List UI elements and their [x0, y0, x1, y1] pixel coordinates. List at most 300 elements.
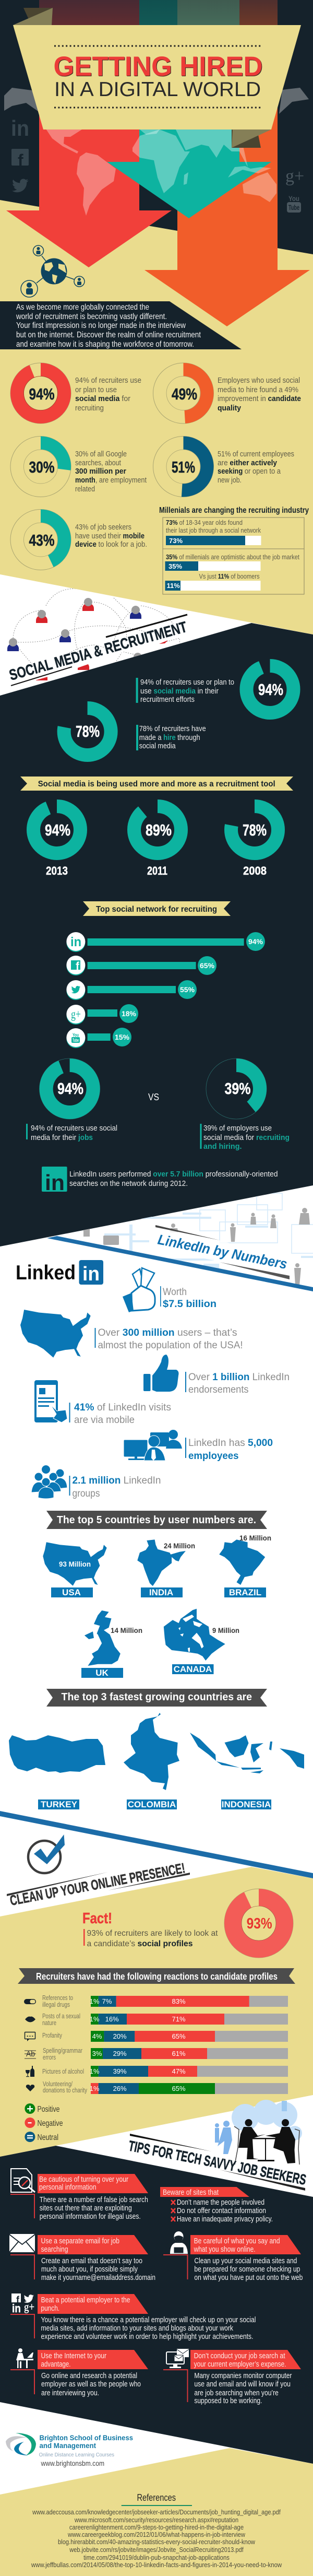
row: google plus: 18% — [122, 1009, 137, 1018]
tip: employer expense: your current employer’s expense. — [194, 2360, 286, 2369]
row: profanity: ... — [26, 2032, 34, 2038]
bar: 73% — [166, 536, 261, 545]
person: blue left — [7, 638, 19, 651]
row: profanity: Profanity — [42, 2032, 63, 2039]
text: 30% — [75, 450, 147, 493]
text: 30%: searches, about — [75, 459, 121, 467]
donut: 2013 — [33, 806, 80, 877]
map: canada: 9 Million — [212, 1626, 239, 1634]
fact heading: Fact! — [82, 1910, 112, 1927]
title banner — [13, 25, 301, 130]
tip: beware of sites: Have an inadequate privacy policy. — [177, 2215, 273, 2224]
panel: clean up your online presence — [0, 1811, 313, 2157]
subtitle: IN A DIGITAL WORLD — [54, 78, 261, 101]
intro panel — [0, 301, 242, 349]
text: employers vs: 39% of employers use — [203, 1124, 272, 1133]
tip: use internet: Use the Internet to your — [41, 2351, 106, 2360]
ribbon: top 3 fastest growing — [46, 1689, 267, 1707]
text: employers vs — [200, 1124, 290, 1151]
intro panel: and examine how it is shaping the workforce of tomorrow. — [16, 340, 194, 349]
text: 94% recruiters — [136, 678, 234, 704]
donut: 94% — [10, 363, 71, 424]
row: illegal drugs — [24, 1994, 288, 2008]
icon: linkedin tile: in — [45, 1170, 65, 1195]
references list — [31, 2508, 282, 2569]
icon: thumbs up — [143, 1355, 178, 1392]
donut: 2011: 89% — [146, 821, 172, 839]
row: alcohol: 39% — [113, 2067, 127, 2075]
map: usa large — [20, 1310, 91, 1358]
text: 78% hires: made a hire through — [139, 733, 200, 742]
ribbon: top social network: Top social network for recruiting — [96, 905, 217, 914]
stat: users — [95, 1327, 243, 1351]
arrow: orange — [145, 25, 310, 326]
fact text: a candidate’s social profiles — [87, 1939, 193, 1948]
text: 78% hires: 78% of recruiters have — [139, 724, 206, 733]
stat: mobile: 41% of LinkedIn visits — [74, 1402, 171, 1413]
donut: 49%: 49% — [172, 385, 197, 403]
tip: beware of sites: Beware of sites that — [163, 2188, 219, 2197]
text: 51%: 51% of current employees — [218, 450, 294, 458]
legend — [25, 2103, 63, 2142]
bar: 11%: 11% — [167, 582, 180, 590]
donut: 30%: 30% — [29, 458, 54, 476]
dark panel background — [0, 623, 313, 1246]
panel: millenials chart: their last job through a social network — [166, 526, 261, 534]
map: uk: UK — [95, 1668, 109, 1678]
tip: beat employer: media sites, add information to your sites and blogs about your work — [41, 2324, 234, 2333]
text: 30%: month, are employment — [75, 476, 147, 485]
row: charity: 1% — [90, 2085, 100, 2092]
text: linkedin searches: LinkedIn users performed over 5.7 billion professionally-oriented — [69, 1170, 278, 1179]
row: facebook: 65% — [200, 961, 215, 970]
stat: endorsements: endorsements — [188, 1384, 248, 1395]
tip: use internet — [10, 2348, 148, 2397]
donut: employers vs: 39% — [224, 1079, 250, 1098]
text: 94%: social media for — [75, 395, 130, 403]
row: profanity: 65% — [172, 2032, 186, 2040]
text: 94%: 94% of recruiters use — [75, 377, 141, 385]
map: canada — [164, 1609, 239, 1674]
text: 43% — [75, 523, 147, 549]
row: sexual posts: 1% — [90, 2015, 100, 2023]
stat: endorsements — [185, 1372, 290, 1395]
text: linkedin searches: searches on the network during 2012. — [69, 1179, 188, 1188]
donut: 93% — [224, 1889, 293, 1958]
tip: employer expense: supposed to be working. — [194, 2397, 262, 2405]
references heading: References — [137, 2492, 176, 2503]
school name — [39, 2433, 133, 2467]
row: illegal drugs: illegal drugs — [42, 2001, 70, 2008]
icon: group — [31, 1465, 67, 1499]
text: 78% hires: social media — [139, 742, 176, 750]
person: clipped — [134, 653, 141, 657]
icon: document search — [11, 2169, 35, 2192]
panel: tips for tech savvy job seekers — [0, 2095, 313, 2464]
tip: careful online: what you show online. — [194, 2245, 256, 2254]
icon: linkedin faint: in — [11, 116, 29, 140]
row: illegal drugs: References to — [42, 1994, 73, 2002]
row: sexual posts: nature — [42, 2019, 56, 2027]
row: illegal drugs: 83% — [172, 1997, 186, 2005]
row: youtube: You — [73, 1032, 79, 1038]
row: google plus: g+ — [71, 1008, 81, 1021]
text: linkedin searches — [69, 1170, 278, 1188]
text: recruiters vs — [26, 1124, 117, 1142]
school name: and Management — [40, 2441, 96, 2450]
row: charity — [26, 2080, 288, 2094]
ribbon: top 5 countries: The top 5 countries by user numbers are. — [57, 1514, 256, 1526]
title line 1: GETTING HIRED — [54, 52, 263, 83]
map: canada: CANADA — [174, 1664, 212, 1674]
row: spelling: Ab — [26, 2050, 35, 2059]
arrow: teal — [107, 25, 271, 218]
tip: beware of sites — [160, 2187, 273, 2224]
map: indonesia — [190, 1733, 304, 1809]
row: profanity: 4% — [92, 2032, 102, 2040]
map: brazil: BRAZIL — [229, 1587, 261, 1597]
icon: phone — [34, 1380, 67, 1422]
panel: header — [0, 0, 313, 634]
text: 43%: 43% of job seekers — [75, 523, 131, 532]
person: blue centre — [59, 629, 71, 642]
text: 49%: quality — [218, 404, 241, 413]
icon: social cluster: in — [12, 2302, 21, 2315]
row: youtube: 15% — [115, 1033, 130, 1041]
text: employers vs: and hiring. — [203, 1142, 242, 1151]
text: 51% — [218, 450, 294, 485]
map: india: INDIA — [149, 1587, 173, 1597]
panel: millenials chart: 73% of 18-34 year olds found — [166, 519, 243, 526]
stat: employees — [185, 1438, 273, 1462]
logo: swoosh — [6, 2433, 36, 2455]
stat: employees: LinkedIn has 5,000 — [188, 1438, 273, 1449]
stat: groups: groups — [72, 1488, 100, 1499]
bar: 35%: 35% — [168, 562, 182, 570]
text: 49%: Employers who used social — [218, 377, 300, 385]
tip: beware of sites: Don’t name the people involved — [177, 2198, 264, 2207]
text: 30%: 30% of all Google — [75, 450, 127, 458]
icon: twitter faint — [12, 179, 28, 192]
icon: social cluster: g+ — [24, 2300, 34, 2313]
tip: use internet: are interviewing you. — [41, 2389, 99, 2397]
text: 78% hires — [136, 724, 206, 750]
text: 43%: have used their mobile — [75, 532, 145, 540]
stat: users: Over 300 million users – that’s — [98, 1327, 237, 1338]
arrow: red — [6, 25, 172, 267]
donut: 2008 — [231, 806, 278, 877]
intro panel: Your first impression is no longer made in the interview — [16, 321, 186, 330]
row: youtube: Tube — [73, 1038, 79, 1043]
icon: checkmark — [28, 1834, 65, 1873]
label: vs: VS — [148, 1092, 159, 1102]
tip: use internet: employer as well as the people who — [41, 2380, 141, 2389]
text: employers vs: social media for recruiting — [203, 1133, 290, 1142]
donut: 2013: 2013 — [46, 864, 68, 877]
dark panel background — [0, 2146, 313, 2464]
school name: Online Distance Learning Courses — [39, 2452, 114, 2458]
donut: 2013: 94% — [45, 821, 70, 839]
donut: 2008: 78% — [243, 821, 267, 839]
blue divider — [47, 1236, 313, 1291]
row: spelling: 3% — [92, 2050, 102, 2057]
text: 49% — [218, 377, 301, 413]
stat: mobile — [69, 1402, 171, 1426]
icon: employees — [124, 1430, 182, 1461]
donut: 78% hires — [64, 708, 111, 755]
stat: worth: $7.5 billion — [163, 1299, 216, 1310]
row: spelling: 29% — [113, 2050, 127, 2057]
tip: separate email: Create an email that doesn’t say too — [41, 2257, 142, 2265]
icon: hand with money — [123, 1268, 155, 1312]
chart: reactions — [24, 1994, 288, 2094]
row: sexual posts: Posts of a sexual — [42, 2013, 80, 2020]
tip: employer expense: are job searching when you’re — [194, 2389, 279, 2397]
ribbon: reactions — [18, 1968, 295, 1984]
person: blue right — [130, 606, 141, 619]
text: 94% recruiters: 94% of recruiters use or plan to — [140, 678, 234, 687]
text: 94%: or plan to use — [75, 386, 117, 394]
logo: linkedin: in — [82, 1263, 100, 1285]
ribbon: recruitment tool: Social media is being used more and more as a recruitment tool — [38, 780, 275, 789]
references list: web.jobvite.com/rs/jobvite/images/Jobvite_SocialRecruiting2013.pdf — [69, 2546, 244, 2554]
icon: youtube faint — [287, 194, 301, 213]
icon: facebook faint — [11, 149, 29, 170]
tip: use internet: Go online and research a potential — [41, 2372, 137, 2380]
row: sexual posts: 71% — [172, 2015, 186, 2023]
tip: beware of sites: Do not offer contact information — [177, 2207, 266, 2215]
references list: www.careergeekblog.com/2012/01/06/what-happens-in-job-interview — [67, 2531, 246, 2538]
donut: recruiters vs — [40, 1058, 100, 1119]
map: colombia — [124, 1713, 179, 1809]
heading banner: social media & recruitment — [7, 615, 189, 687]
text: 49%: media to hire found a 49% — [218, 386, 298, 394]
tip: separate email: Use a separate email for job — [41, 2237, 119, 2245]
donut: 49% — [153, 363, 214, 424]
icon: youtube faint: You — [288, 194, 299, 203]
person: red bottom — [36, 677, 47, 680]
ribbon: recruitment tool — [20, 777, 293, 791]
stat: users: almost the population of the USA! — [98, 1340, 243, 1351]
tip: separate email: much about you, if possible simply — [41, 2265, 138, 2274]
panel: millenials chart: Vs just 11% of boomers — [199, 572, 260, 580]
heading: clean up: CLEAN UP YOUR ONLINE PRESENCE! — [9, 1860, 186, 1909]
ribbon: top 3 fastest growing: The top 3 fastest growing countries are — [62, 1691, 252, 1703]
row: facebook — [66, 956, 216, 975]
map: turkey: TURKEY — [41, 1799, 78, 1809]
icon: google plus faint: g+ — [285, 167, 304, 186]
row: profanity: 20% — [113, 2032, 127, 2040]
row: twitter — [66, 980, 197, 1000]
row: charity: donations to charity — [43, 2087, 88, 2094]
row: illegal drugs: 7% — [102, 1997, 112, 2005]
row: charity: 65% — [172, 2085, 186, 2092]
heading: clean up — [7, 1860, 190, 1909]
legend: neutral: Neutral — [38, 2133, 58, 2142]
donut: 43%: 43% — [29, 531, 54, 549]
tip: separate email — [9, 2234, 155, 2282]
donut: 78% hires: 78% — [76, 722, 100, 740]
network illustration — [7, 589, 180, 680]
donut: 2008: 2008 — [243, 864, 267, 877]
text: 51%: are either actively — [218, 459, 277, 467]
row: alcohol: Pictures of alcohol — [42, 2068, 84, 2075]
bar: 11% — [165, 581, 261, 591]
references list: www.jeffbullas.com/2014/05/08/the-top-10-linkedin-facts-and-figures-in-2014-you-need-to-know — [31, 2561, 282, 2569]
title: GETTING HIRED — [53, 51, 263, 82]
blue divider — [0, 1811, 313, 1878]
map: colombia: COLOMBIA — [128, 1799, 176, 1809]
icon: connected globe — [21, 245, 85, 297]
row: profanity — [25, 2031, 288, 2042]
legend: negative: Negative — [38, 2119, 63, 2128]
tip: careful online: Be careful of what you say and — [194, 2237, 280, 2245]
references heading — [122, 2492, 192, 2506]
icon: linkedin tile — [42, 1167, 67, 1195]
icon: person at desk — [16, 2348, 33, 2368]
donut: 94% recruiters — [246, 666, 293, 713]
icon: facebook faint: f — [18, 151, 23, 170]
stat: endorsements: Over 1 billion LinkedIn — [188, 1372, 290, 1383]
person: red — [82, 598, 94, 611]
text: 43%: device to look for a job. — [75, 540, 147, 549]
row: spelling: Spelling/grammar — [43, 2047, 82, 2054]
text: recruiters vs: 94% of recruiters use social — [31, 1124, 117, 1133]
stat: mobile: are via mobile — [74, 1415, 135, 1426]
text: 49%: improvement in candidate — [218, 395, 301, 403]
text: recruiters vs: media for their jobs — [31, 1133, 93, 1142]
panel: millenials chart — [163, 517, 304, 594]
donut: 93%: 93% — [247, 1915, 272, 1932]
school name: www.brightonsbm.com — [41, 2459, 104, 2467]
tip: personal information: There are a number of false job search — [40, 2196, 148, 2204]
row: spelling — [25, 2047, 288, 2061]
row: linkedin — [66, 932, 265, 952]
row: alcohol: 1% — [90, 2067, 100, 2075]
donut: 94% recruiters: 94% — [258, 680, 283, 699]
tip: separate email: searching — [41, 2245, 68, 2254]
row: sexual posts — [25, 2013, 288, 2027]
map: usa: 93 Million — [59, 1560, 91, 1568]
fact text: 93% of recruiters are likely to look at — [87, 1929, 218, 1938]
map: uk — [81, 1610, 142, 1678]
row: google plus — [66, 1004, 138, 1025]
references list: careerenlightenment.com/9-steps-to-getting-hired-in-the-digital-age — [69, 2523, 244, 2531]
text: 94% — [75, 377, 141, 413]
text: 51%: seeking or open to a — [218, 467, 281, 476]
text: 94%: recruiting — [75, 404, 104, 413]
tip: beat employer: You know there is a chance a potential employer will check up on your social — [41, 2316, 256, 2324]
bar chart: social networks — [66, 932, 265, 1048]
row: alcohol: 47% — [172, 2067, 186, 2075]
donut: 30% — [10, 437, 71, 497]
row: alcohol — [26, 2066, 288, 2077]
tip: use internet: advantage. — [41, 2360, 71, 2369]
map: usa: USA — [62, 1587, 81, 1597]
stat: employees: employees — [188, 1451, 239, 1462]
person: red lower — [78, 664, 89, 670]
references list: time.com/2941019/dublin-pub-snapchat-job-applications — [83, 2554, 230, 2561]
bar: 73%: 73% — [169, 537, 183, 545]
text: 94% recruiters: recruitment efforts — [140, 695, 195, 704]
legend: positive: Positive — [38, 2105, 60, 2114]
tip: personal information: personal information for illegal uses. — [40, 2213, 141, 2221]
icon: person at laptop — [170, 2231, 188, 2254]
donut: 51%: 51% — [172, 458, 195, 476]
tip: employer expense — [163, 2349, 301, 2405]
tip: beat employer — [10, 2293, 256, 2341]
top colour strips — [39, 0, 278, 26]
references list: www.microsoft.com/security/resources/research.aspx#reputation — [74, 2516, 238, 2524]
panel: linkedin by numbers — [9, 1193, 313, 1809]
icon: social cluster — [11, 2293, 34, 2315]
tip: personal information: Be cautious of turning over your — [39, 2175, 128, 2184]
stat: worth — [160, 1286, 216, 1310]
text: 94% recruiters: use social media in their — [140, 687, 219, 696]
icon: computer with mail — [166, 2349, 189, 2368]
tip: personal information: sites out there that are exploiting — [40, 2204, 132, 2213]
row: linkedin: in — [70, 935, 81, 949]
text: 30%: 300 million per — [75, 467, 126, 476]
school name: Brighton School of Business — [40, 2433, 133, 2442]
tip: beat employer: punch. — [41, 2304, 59, 2313]
map: turkey — [9, 1735, 105, 1809]
donut: 2011 — [134, 806, 181, 877]
logo: linkedin: Linked — [16, 1262, 76, 1284]
map: indonesia: INDONESIA — [222, 1799, 271, 1809]
references list: blog.hirerabbit.com/40-amazing-statistics-every-social-recruiter-should-know — [58, 2538, 256, 2546]
ribbon folds — [13, 8, 271, 148]
tip: careful online — [163, 2231, 303, 2282]
icon: envelope — [9, 2234, 35, 2252]
map: india — [137, 1539, 195, 1597]
illustration: interview — [215, 2100, 302, 2165]
panel: brighton school footer — [0, 2433, 313, 2576]
row: spelling: 61% — [172, 2050, 186, 2057]
world map — [4, 88, 309, 216]
stat: groups — [69, 1475, 161, 1499]
donut: 51% — [153, 437, 214, 497]
donut: 94%: 94% — [29, 385, 54, 403]
panel: social media & recruitment — [0, 574, 313, 1246]
row: youtube — [66, 1028, 131, 1048]
tip: personal information: personal information — [39, 2183, 96, 2192]
stat: worth: Worth — [163, 1287, 187, 1298]
donut: 43% — [10, 510, 71, 570]
row: twitter: 55% — [180, 985, 195, 994]
text: 51%: new job. — [218, 476, 242, 485]
tip: beat employer: Beat a potential employer to the — [41, 2296, 130, 2304]
donut: employers vs — [206, 1058, 267, 1119]
map: india: 24 Million — [164, 1542, 195, 1550]
icon: youtube faint: Tube — [288, 203, 299, 211]
intro panel: world of recruitment is becoming vastly different. — [16, 312, 167, 321]
screens and silhouettes backdrop — [83, 1193, 313, 1286]
row: charity: 26% — [113, 2085, 127, 2092]
map: uk: 14 Million — [111, 1626, 142, 1634]
ribbon: top social network — [83, 901, 231, 916]
tip: employer expense: Many companies monitor computer — [194, 2372, 292, 2380]
tip: personal information — [10, 2169, 148, 2221]
row: illegal drugs: 1% — [90, 1997, 100, 2005]
heading banner: social media & recruitment: SOCIAL MEDIA & RECRUITMENT — [7, 619, 189, 684]
row: spelling: errors — [43, 2054, 56, 2061]
tip: employer expense: use and email and will know if you — [194, 2380, 291, 2389]
row: charity: Volunteering/ — [43, 2080, 73, 2088]
intro panel: As we become more globally connected the — [16, 303, 149, 312]
text: 30%: related — [75, 485, 95, 493]
intro panel: but on the internet. Discover the realm of online recruitment — [16, 331, 201, 339]
